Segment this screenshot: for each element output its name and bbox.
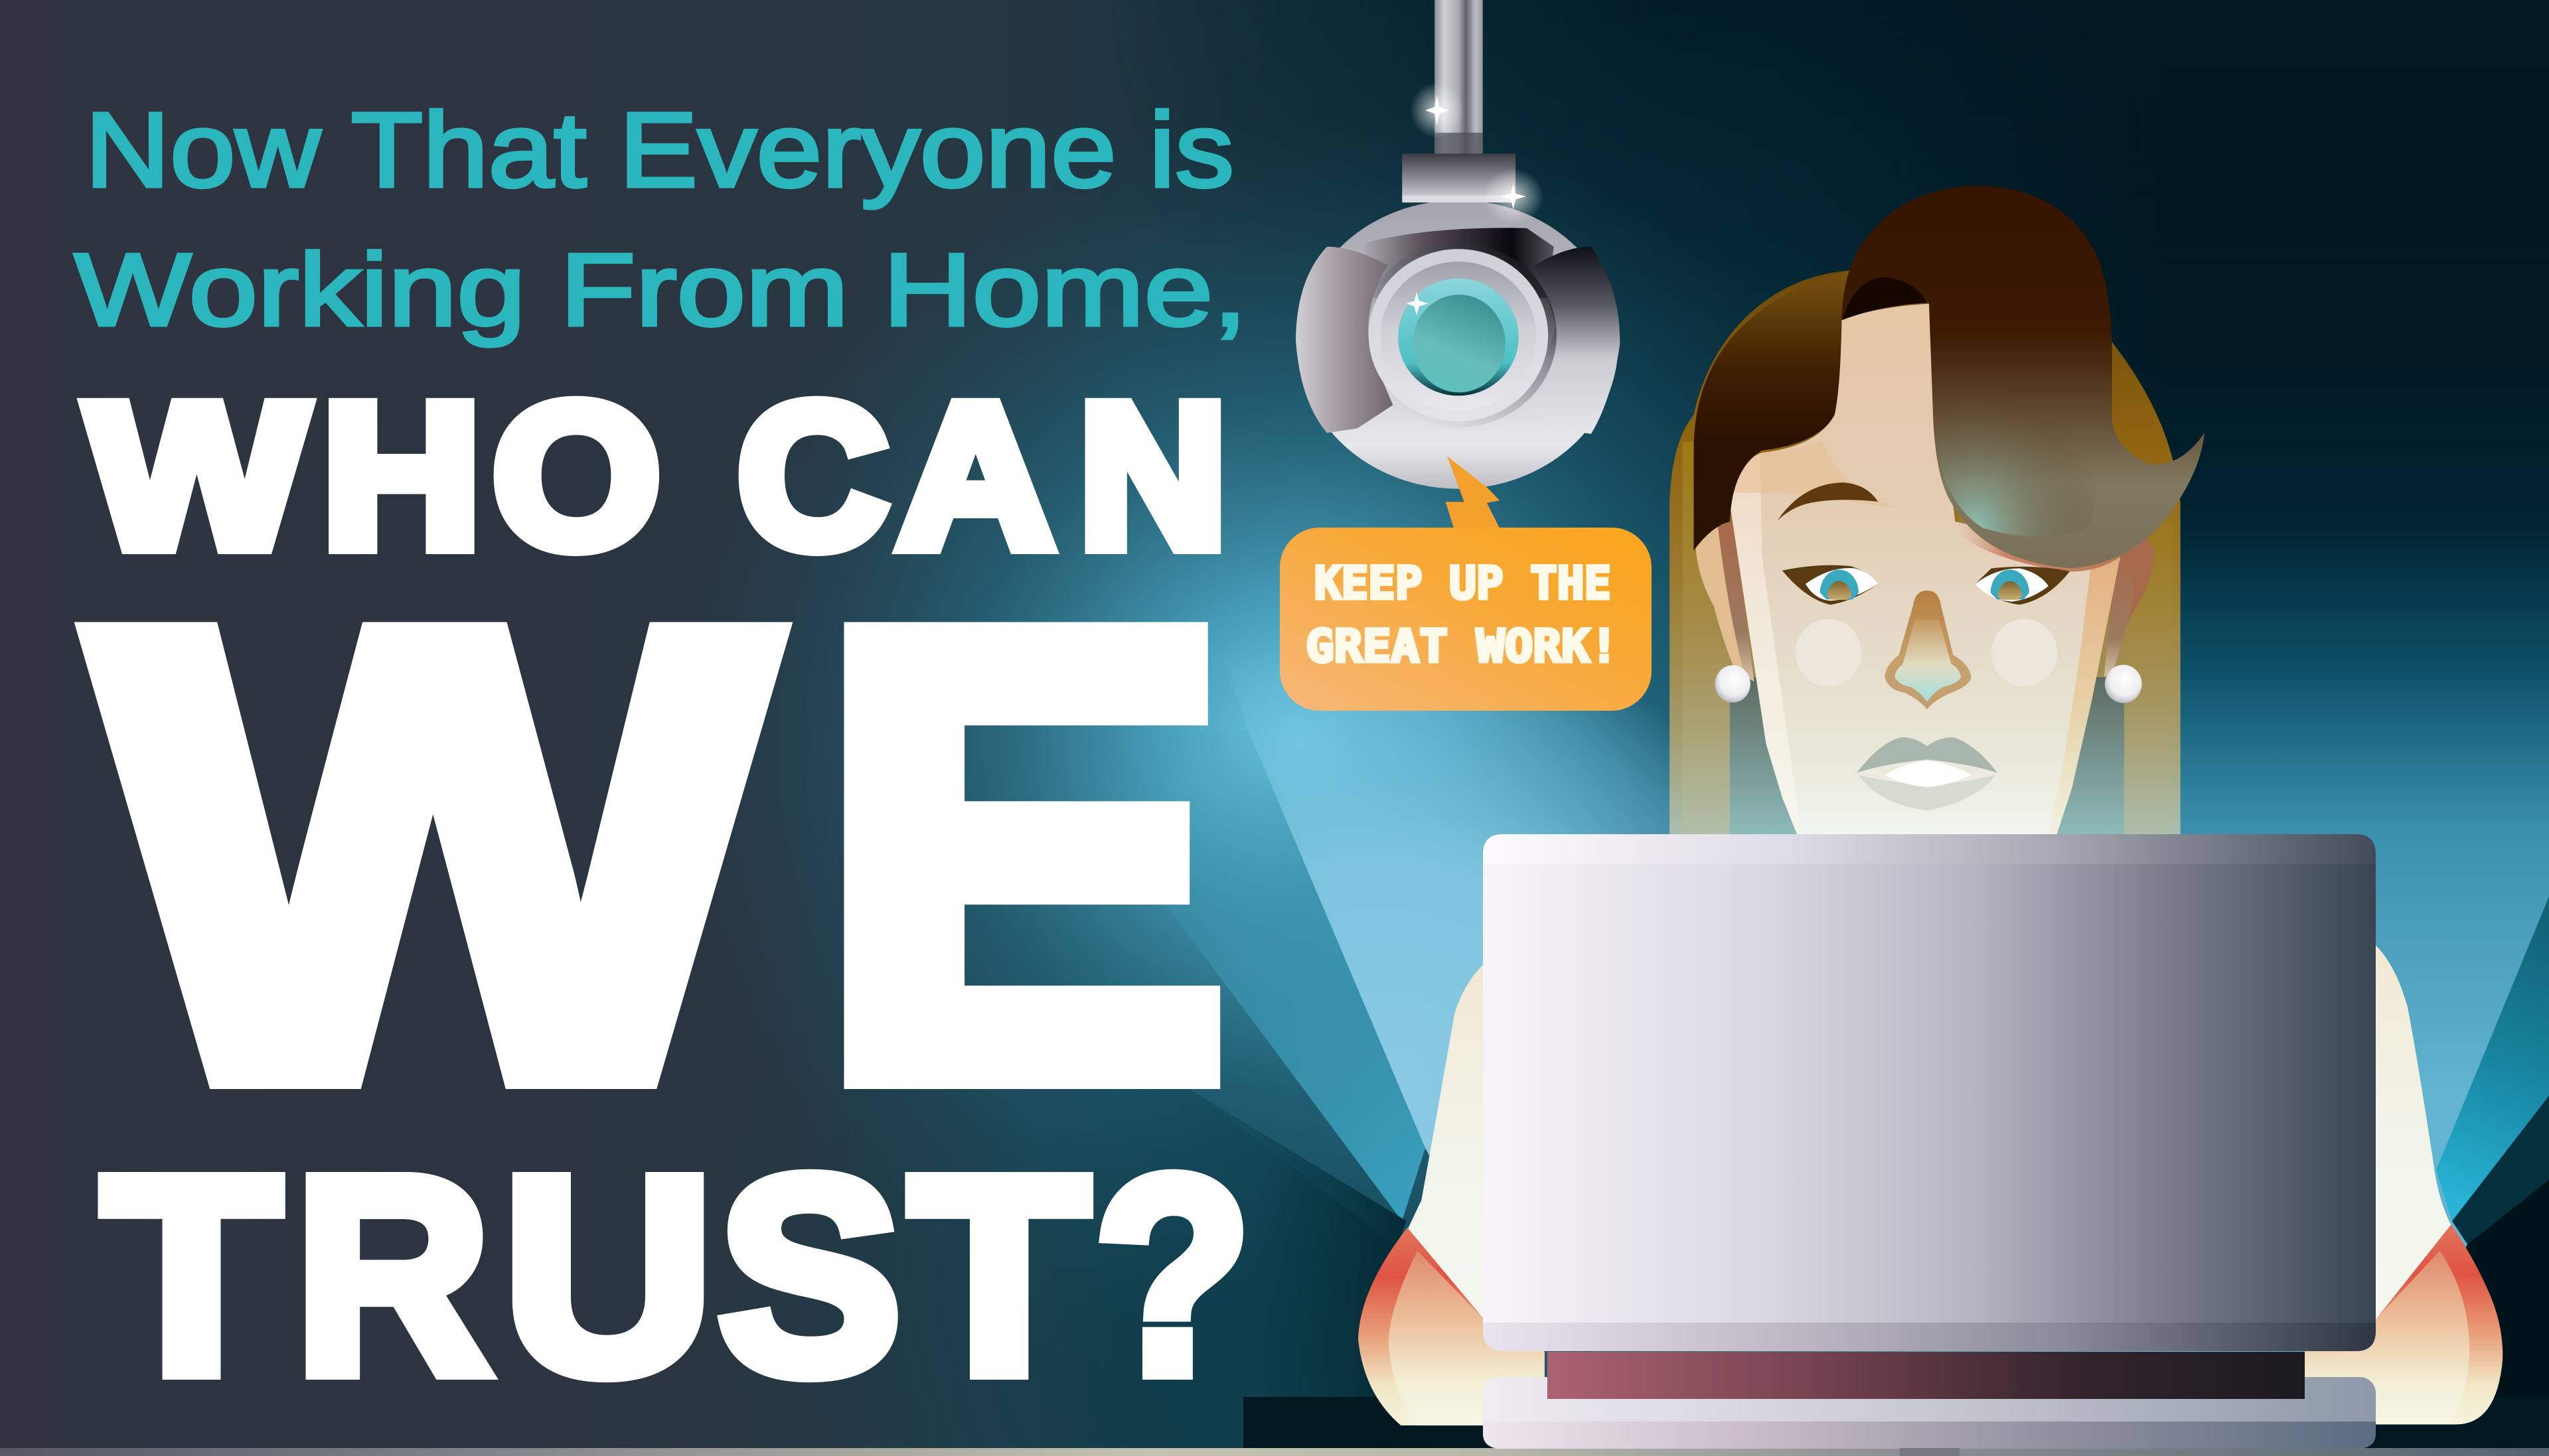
dark floor (1243, 1397, 2549, 1449)
webcam lens (1360, 243, 1557, 427)
title: trust: ? (1095, 1120, 1251, 1431)
title: trust: T (103, 1120, 280, 1431)
webcam body (1296, 200, 1620, 489)
title: trust: U (503, 1120, 713, 1431)
fringe (1842, 186, 2204, 568)
title: we: W (98, 502, 776, 1206)
subtitle line one: Now That Everyone is (85, 90, 1234, 209)
background (743, 0, 2549, 1448)
webcam pole (1434, 0, 1483, 153)
title: trust: R (295, 1120, 490, 1431)
title: we: E (819, 502, 1228, 1206)
light beams left of laptop (996, 597, 1679, 1448)
bottom strip (0, 1448, 2549, 1456)
title: who can: O (493, 362, 660, 590)
title: who can (88, 362, 1227, 590)
title: who can: C (738, 362, 887, 590)
shadow under fringe (1955, 513, 2120, 571)
webcam (1296, 0, 1620, 528)
laptop base (1483, 1377, 2376, 1456)
title: who can: H (323, 362, 481, 590)
ears (1696, 517, 2154, 682)
nose (1885, 591, 1971, 709)
title: we (98, 502, 1228, 1206)
left eye (1782, 565, 1878, 605)
title: who can: W (88, 362, 308, 590)
webcam sparkles (1407, 82, 1544, 316)
title: trust: S (718, 1120, 901, 1431)
right arm (2305, 945, 2503, 1425)
face (1730, 304, 2120, 837)
laptop lid (1483, 834, 2376, 1351)
left hair (1694, 270, 1851, 551)
title: who can: A (898, 362, 1053, 590)
right hand (2305, 1224, 2503, 1425)
webcam mount (1402, 153, 1515, 202)
earrings (1715, 665, 2142, 703)
subtitle line two: Working From Home, (74, 232, 1247, 347)
title: who can: N (1079, 362, 1227, 590)
speech bubble (1280, 528, 1652, 711)
headline (74, 90, 1251, 1431)
eyebrow (1778, 482, 1878, 521)
light beams right of laptop (2390, 897, 2549, 1400)
right eye (1975, 567, 2070, 605)
left arm (1358, 965, 1545, 1425)
laptop (1483, 834, 2376, 1456)
lips (1857, 737, 1997, 811)
title: trust: T (910, 1120, 1088, 1431)
speech bubble text line one: KEEP UP THE (1314, 557, 1611, 610)
speech bubble text line two: GREAT WORK! (1306, 620, 1618, 673)
cheeks (1796, 619, 2057, 687)
title: trust (103, 1120, 1251, 1431)
back hair (1669, 270, 2181, 837)
speech bubble pointer (1446, 456, 1500, 528)
laptop hinge (1547, 1352, 2305, 1399)
left hand (1358, 1228, 1545, 1425)
woman (1669, 186, 2204, 837)
